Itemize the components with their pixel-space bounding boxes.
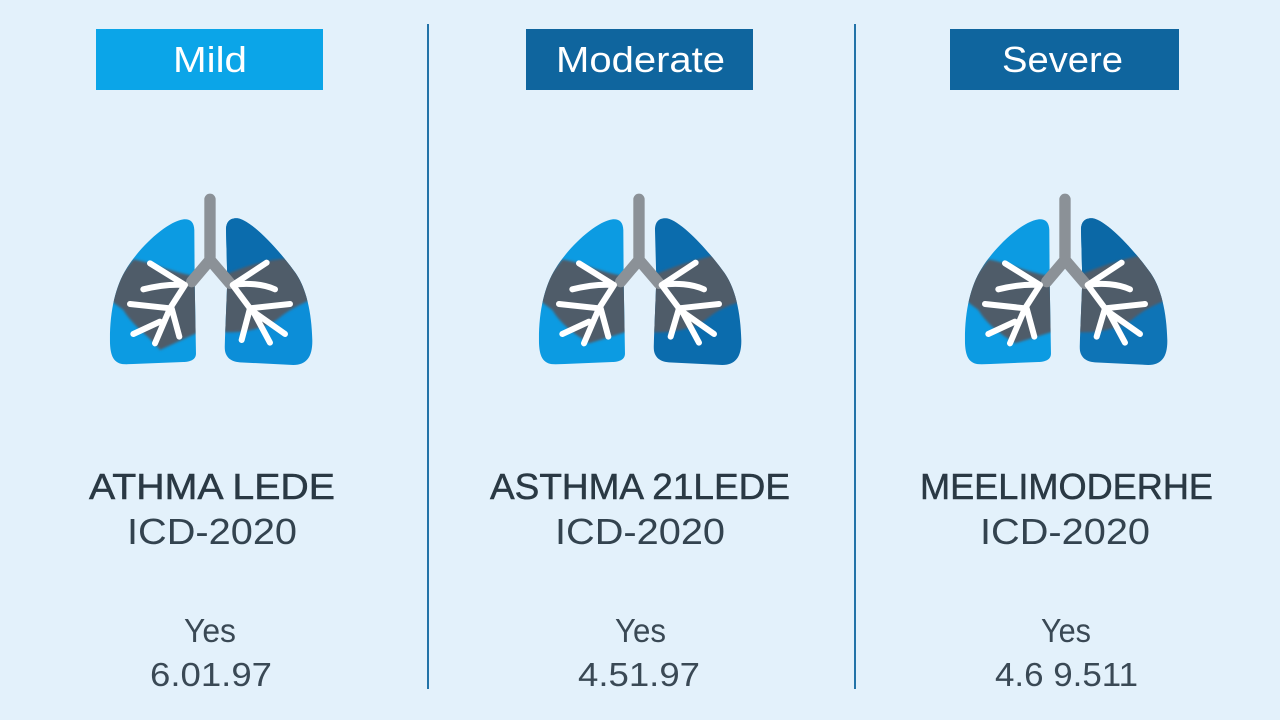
panel: moderate [490, 29, 790, 693]
heading: moderate [526, 29, 753, 90]
heading: mild: Mild [173, 39, 247, 80]
icon: lungs, severe [958, 199, 1175, 370]
heading: mild [96, 29, 323, 90]
icon: lungs, moderate [532, 199, 749, 370]
label: ICD code: ICD-2020 [555, 511, 725, 552]
label: ICD code: ICD-2020 [980, 511, 1150, 552]
label: yes: Yes [184, 612, 236, 649]
icon: lungs, mild [103, 199, 320, 370]
label: ICD code: ICD-2020 [127, 511, 297, 552]
label: yes: Yes [1041, 612, 1091, 649]
heading: severe: Severe [1002, 39, 1123, 80]
label: asthma level: MEELIMODERHE [920, 466, 1213, 507]
panel: mild [89, 29, 335, 693]
label: asthma level: ASTHMA 21LEDE [490, 466, 790, 507]
value: 6.01.97 [150, 656, 272, 693]
label: yes: Yes [615, 612, 666, 649]
value: 4.6 9.511 [995, 656, 1138, 693]
value: 4.51.97 [578, 656, 700, 693]
label: asthma level: ATHMA LEDE [89, 466, 335, 507]
panel: severe [920, 29, 1213, 693]
heading: severe [950, 29, 1179, 90]
heading: moderate: Moderate [556, 39, 725, 80]
